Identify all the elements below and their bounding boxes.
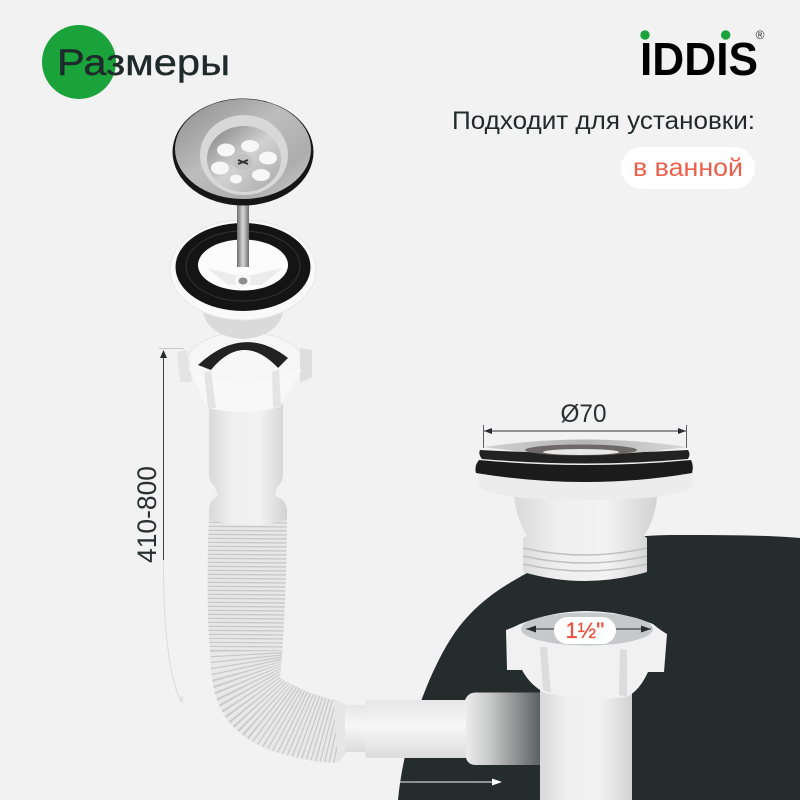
vertical upper tube xyxy=(209,400,287,525)
nut opening xyxy=(521,612,653,646)
logo: IDDIS: ® xyxy=(756,28,765,42)
product: large drain side view xyxy=(475,440,693,581)
dimension: height 410-800 xyxy=(132,348,184,704)
horizontal outlet tube xyxy=(333,692,540,765)
threaded rod xyxy=(237,200,249,267)
text: suitable for installation: Подходит для установки: xyxy=(452,107,755,135)
white flange with black gasket xyxy=(170,220,316,320)
threaded spigot xyxy=(202,305,284,339)
nut ribs xyxy=(540,647,627,697)
dimension: 1 1/2 inch xyxy=(526,617,651,644)
black gasket rings xyxy=(475,450,693,482)
threaded neck xyxy=(514,497,657,581)
product: exploded drain flange xyxy=(170,98,316,339)
dimension: diameter 70 xyxy=(484,400,686,448)
product: pipe with nut, front xyxy=(506,611,667,800)
product: flexible siphon pipe xyxy=(177,332,540,770)
nut body xyxy=(506,611,667,699)
steel top plate xyxy=(484,440,687,454)
heading: Размеры with green circle: Размеры xyxy=(57,42,230,83)
heading: Размеры with green circle xyxy=(42,25,230,99)
dimension: 1 1/2 inch: 1½'' xyxy=(566,618,604,643)
dimension: height 410-800: 410-800 xyxy=(132,466,162,563)
dark background shape xyxy=(398,535,800,800)
logo: IDDIS: IDDIS xyxy=(640,33,758,85)
steel strainer cap xyxy=(172,98,314,206)
badge: in the bathroom xyxy=(621,147,755,189)
vertical pipe xyxy=(540,680,632,800)
white flange xyxy=(478,470,693,500)
bowl highlight xyxy=(525,444,637,456)
dimension: diameter 70: Ø70 xyxy=(560,400,606,428)
dimension: horizontal white arrow xyxy=(240,778,502,786)
badge: in the bathroom: в ванной xyxy=(633,154,743,182)
upper nut xyxy=(177,332,312,412)
corrugated hose xyxy=(208,520,338,763)
